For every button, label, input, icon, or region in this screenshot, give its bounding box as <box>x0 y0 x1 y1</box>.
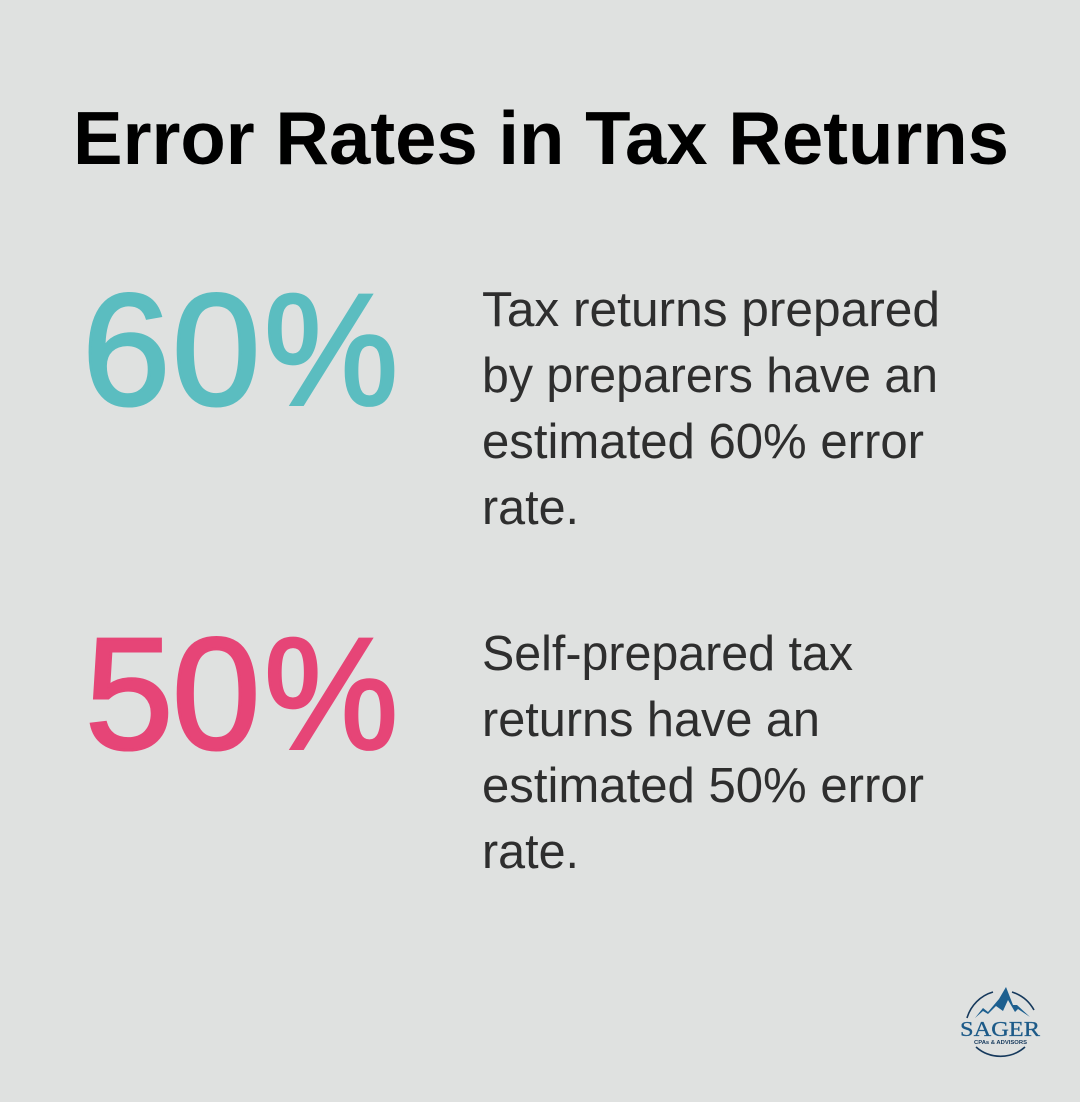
text block: preparer error rate: estimated 60% error <box>482 415 924 469</box>
text block: self-prepared error rate: returns have an <box>482 693 820 747</box>
text block: preparer error rate <box>482 283 940 535</box>
logo: Sager CPAs & Advisors <box>960 987 1040 1056</box>
stat: 50%: % <box>264 605 398 782</box>
stat: 60% <box>82 260 398 438</box>
logo ring <box>967 992 1034 1056</box>
text block: preparer error rate: by preparers have an <box>482 349 938 403</box>
stat: 60%: 60 <box>82 260 260 438</box>
stat: 60%: % <box>264 261 398 438</box>
text block: self-prepared error rate: estimated 50% error <box>482 759 924 813</box>
text block: preparer error rate: Tax returns prepared <box>482 283 940 337</box>
text block: preparer error rate: rate. <box>482 481 579 535</box>
text block: self-prepared error rate <box>482 627 924 879</box>
text block: self-prepared error rate: rate. <box>482 825 579 879</box>
stat: 50%: 50 <box>85 604 260 782</box>
logo name: SAGER <box>960 1017 1040 1041</box>
icon: mountain <box>975 987 1030 1018</box>
logo tagline: CPAs & ADVISORS <box>974 1040 1028 1046</box>
text block: self-prepared error rate: Self-prepared tax <box>482 627 853 681</box>
title: Error Rates in Tax Returns <box>73 96 1009 180</box>
stat: 50% <box>85 604 398 782</box>
